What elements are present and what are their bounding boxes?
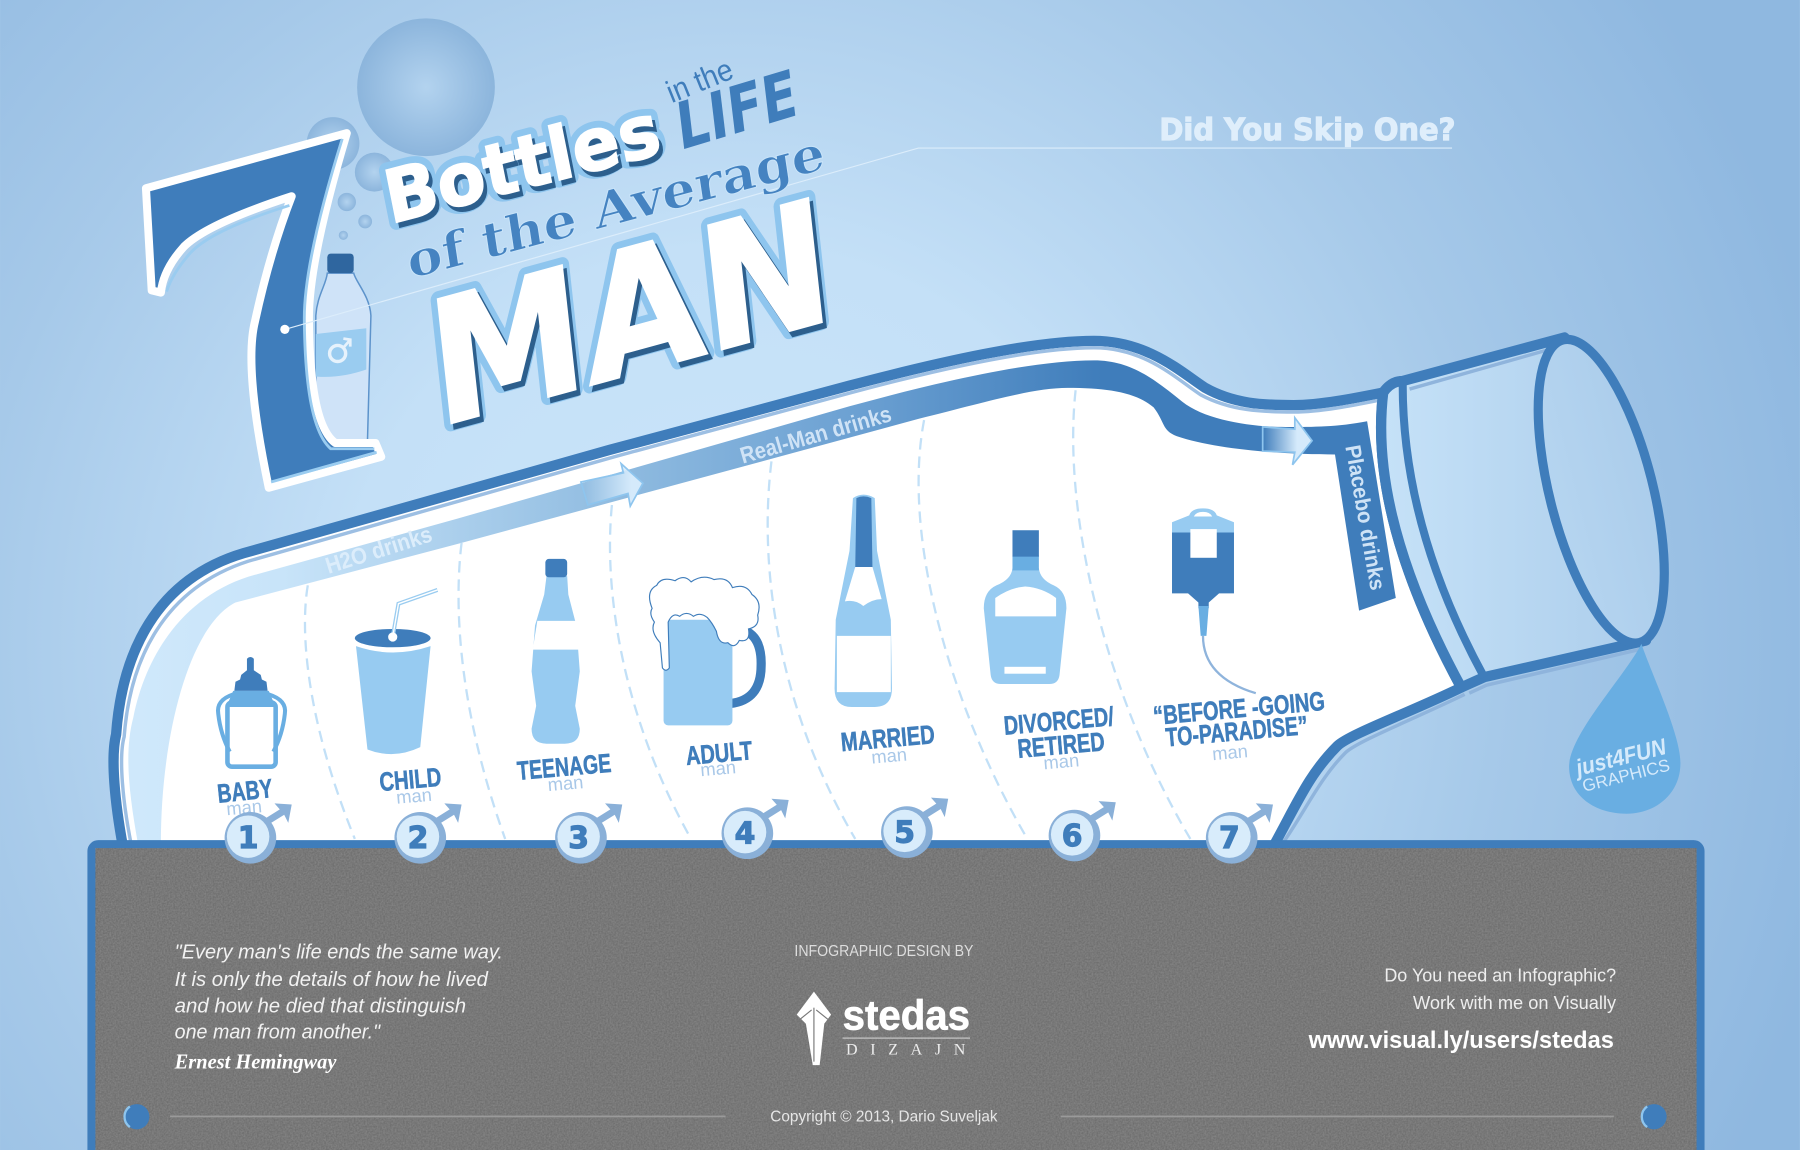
title: of the Average: of the Average (403, 124, 828, 291)
label: baby: man (225, 795, 263, 819)
panel: footer (91, 844, 1701, 1150)
quote: Ernest Hemingway (174, 1052, 337, 1074)
label: before going to paradise: TO-PARADISE” (1164, 710, 1309, 752)
arrow: real-man to placebo (1263, 418, 1312, 465)
label: divorced retired: DIVORCED/ (1003, 701, 1115, 741)
label: adult: man (699, 756, 737, 780)
label: before going to paradise: man (1211, 740, 1249, 764)
icon: water drop logo: GRAPHICS (1580, 755, 1672, 796)
quote: one man from another." (175, 1022, 381, 1044)
logo: stedas dizajn: DIZAJN (846, 1042, 978, 1059)
call to action (1308, 964, 1617, 1054)
icon: soda bottle (532, 559, 580, 744)
icon: IV drip bag (1172, 508, 1256, 693)
icon: whiskey bottle (984, 530, 1066, 684)
label: divorced retired: man (1043, 749, 1080, 773)
band label: Placebo drinks: Placebo drinks (1340, 443, 1391, 592)
label: child: CHILD (378, 762, 442, 797)
label: child: man (395, 784, 433, 808)
label: divorced retired (1003, 701, 1115, 773)
label: divorced retired: RETIRED (1016, 726, 1106, 764)
icon: water drop logo: just4FUN (1571, 733, 1669, 781)
age marker 4: 4 (735, 817, 755, 852)
quote (174, 941, 503, 1074)
drink-type band (128, 360, 1396, 844)
dashed age dividers (305, 390, 1190, 839)
title: Bottles: Bottles (381, 92, 671, 246)
label: baby (216, 773, 274, 819)
title: MAN: MAN (420, 161, 840, 467)
title: Bottles: Bottles (377, 88, 667, 241)
age marker 5 (881, 798, 948, 858)
age marker 4 (722, 799, 789, 859)
callout: leader line (280, 148, 1452, 334)
label: married: man (870, 744, 908, 768)
icon: water bottle beside the 7 (316, 254, 371, 441)
label: before going to paradise: “BEFORE -GOING (1152, 686, 1326, 731)
label: adult: ADULT (685, 735, 753, 771)
title: Bottles: Bottles (377, 88, 667, 241)
bottle neck and mouth (1381, 327, 1690, 693)
callout text: did you skip one: Did You Skip One? (1159, 113, 1455, 148)
age marker 3 (555, 803, 622, 864)
icon: soda cup (355, 590, 437, 754)
label: adult (685, 735, 753, 780)
label: teenage: TEENAGE (516, 748, 612, 786)
age marker 5: 5 (894, 815, 915, 850)
label: teenage: man (547, 771, 584, 795)
label: married: MARRIED (840, 719, 936, 757)
number seven (146, 133, 381, 488)
age marker 2 (394, 803, 462, 864)
quote: "Every man's life ends the same way. (175, 941, 503, 963)
title: MAN: MAN (424, 165, 844, 472)
label: teenage (516, 748, 612, 795)
age marker 7 (1206, 803, 1273, 864)
band label: H2O drinks: H2O drinks (322, 521, 435, 579)
age marker 3: 3 (568, 821, 589, 856)
call to action: www.visual.ly/users/stedas (1308, 1027, 1614, 1054)
icon: beer mug (650, 577, 761, 725)
copyright: Copyright © 2013, Dario Suveljak (770, 1108, 998, 1125)
call to action: Work with me on Visually (1413, 992, 1617, 1013)
design credit heading: INFOGRAPHIC DESIGN BY (794, 943, 973, 960)
age marker 6: 6 (1062, 819, 1083, 854)
call to action: Do You need an Infographic? (1384, 964, 1616, 985)
age marker 7: 7 (1219, 821, 1240, 856)
arrow: H2O to real-man (581, 464, 643, 506)
label: baby: BABY (216, 773, 274, 809)
age marker 1 (225, 803, 292, 864)
bubbles (307, 18, 495, 240)
logo: stedas dizajn (797, 992, 978, 1065)
label: child (378, 762, 442, 808)
label: before going to paradise (1152, 686, 1326, 764)
band label: Real-Man drinks: Real-Man drinks (737, 400, 894, 468)
quote: and how he died that distinguish (175, 995, 466, 1017)
quote: It is only the details of how he lived (175, 969, 489, 991)
title: MAN: MAN (420, 161, 840, 467)
age marker 6 (1049, 801, 1116, 861)
icon: baby bottle (218, 657, 285, 767)
footer rules and dots (124, 1104, 1667, 1129)
logo: stedas dizajn: stedas (843, 992, 970, 1038)
label: married (840, 719, 936, 768)
big bottle outline (114, 341, 1465, 847)
icon: champagne bottle (835, 495, 892, 707)
age marker 2: 2 (408, 821, 428, 856)
title: in the: in the (661, 52, 738, 110)
icon: water drop logo (1569, 644, 1680, 814)
age marker 1: 1 (238, 821, 258, 856)
title: LIFE: LIFE (673, 55, 801, 166)
